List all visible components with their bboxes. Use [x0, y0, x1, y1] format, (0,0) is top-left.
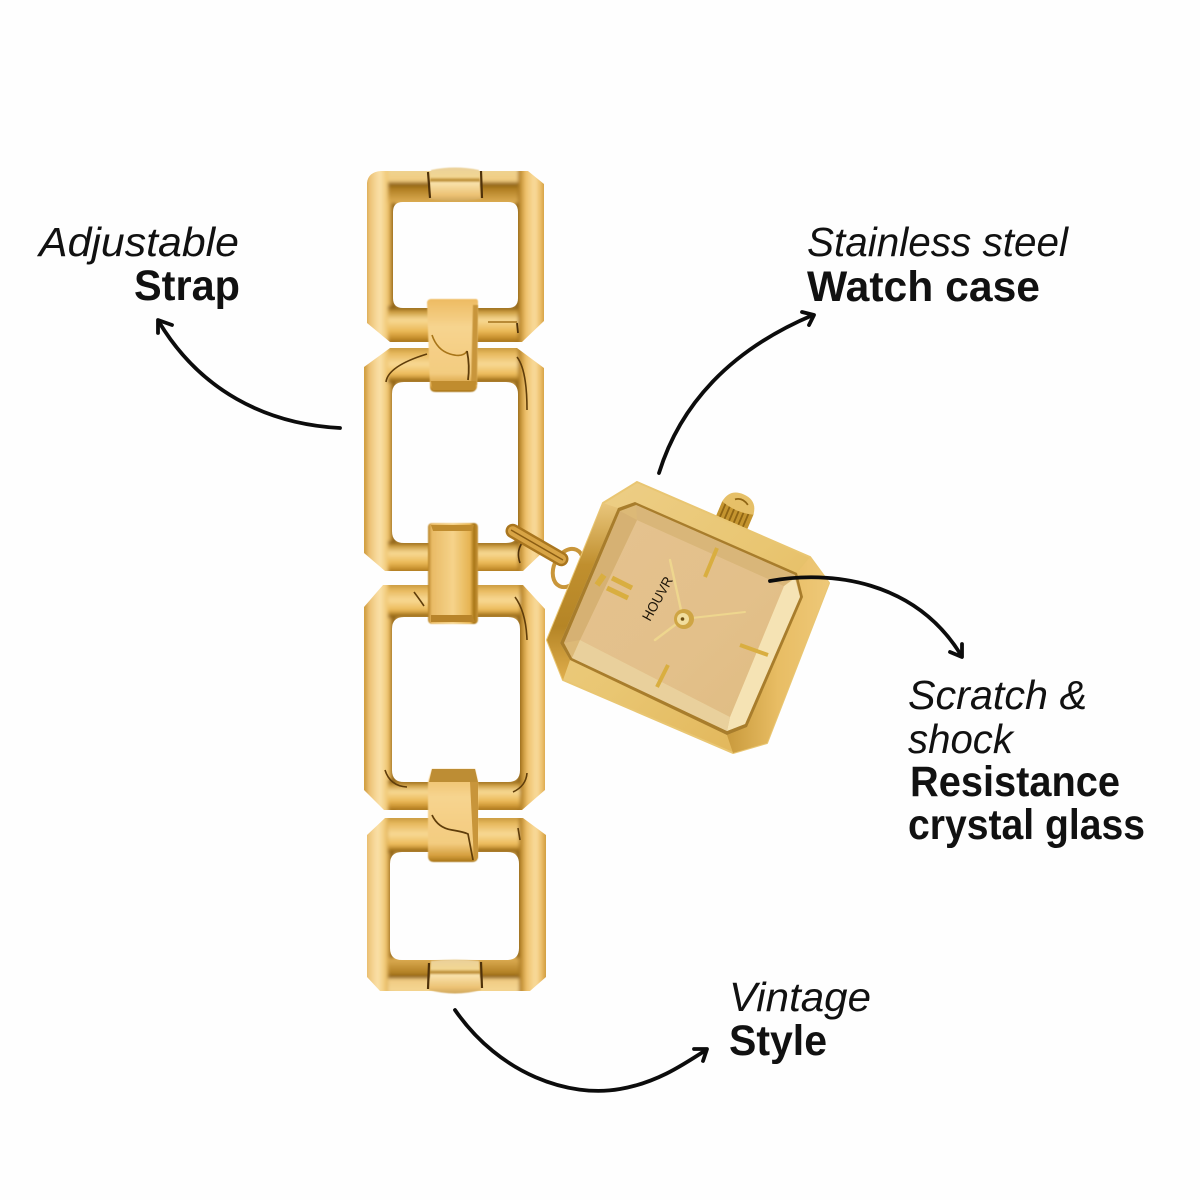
glass reflection top [636, 505, 795, 586]
hour markers [597, 548, 768, 687]
arrow: crystal glass [770, 577, 962, 657]
hand pivot [674, 609, 694, 629]
watch hands [655, 560, 745, 640]
watch head [547, 482, 829, 753]
link 3 [364, 585, 545, 810]
callout: vintage style: Style [729, 1017, 827, 1065]
connector 3 [428, 769, 478, 862]
link 2 [364, 348, 544, 571]
ring: link ring [505, 523, 569, 567]
callout: crystal glass: Resistance [910, 758, 1120, 806]
glass reflection bottom [572, 640, 730, 731]
link 1 [367, 171, 544, 342]
bottom end bar [428, 960, 482, 994]
callout: watch case [807, 219, 1070, 311]
arrow: vintage style [455, 1010, 707, 1091]
arrow: watch case [659, 312, 814, 473]
connector 2 [428, 523, 478, 624]
case right side shading [727, 557, 829, 753]
crown [715, 488, 759, 531]
arrow: strap [158, 320, 340, 428]
callout: adjustable strap [36, 219, 240, 310]
infographic canvas [36, 167, 1144, 1093]
callout: vintage style [729, 974, 871, 1065]
callout: adjustable strap: Strap [134, 262, 240, 310]
brand name: HOUVR [639, 574, 676, 623]
glass reflection right [727, 578, 800, 731]
callout: vintage style: Vintage [729, 974, 871, 1020]
callout: crystal glass [908, 672, 1145, 849]
callout: crystal glass: shock [908, 716, 1015, 762]
bezel [560, 502, 803, 735]
dial [580, 520, 784, 717]
glass facets [564, 505, 800, 731]
callout: watch case: Stainless steel [807, 219, 1070, 265]
callout: crystal glass: crystal glass [908, 801, 1145, 849]
case [547, 482, 829, 753]
ring: lug ring [547, 544, 589, 592]
bracelet strap [364, 167, 546, 994]
link 4 [367, 818, 546, 991]
callout: adjustable strap: Adjustable [36, 219, 239, 265]
connector 1 [427, 299, 478, 392]
connecting rings [505, 523, 589, 592]
callout: watch case: Watch case [807, 263, 1040, 311]
top end bar [428, 168, 482, 201]
case left side shading [547, 503, 618, 680]
callout: crystal glass: Scratch & [908, 672, 1087, 718]
glass reflection left [564, 511, 637, 643]
